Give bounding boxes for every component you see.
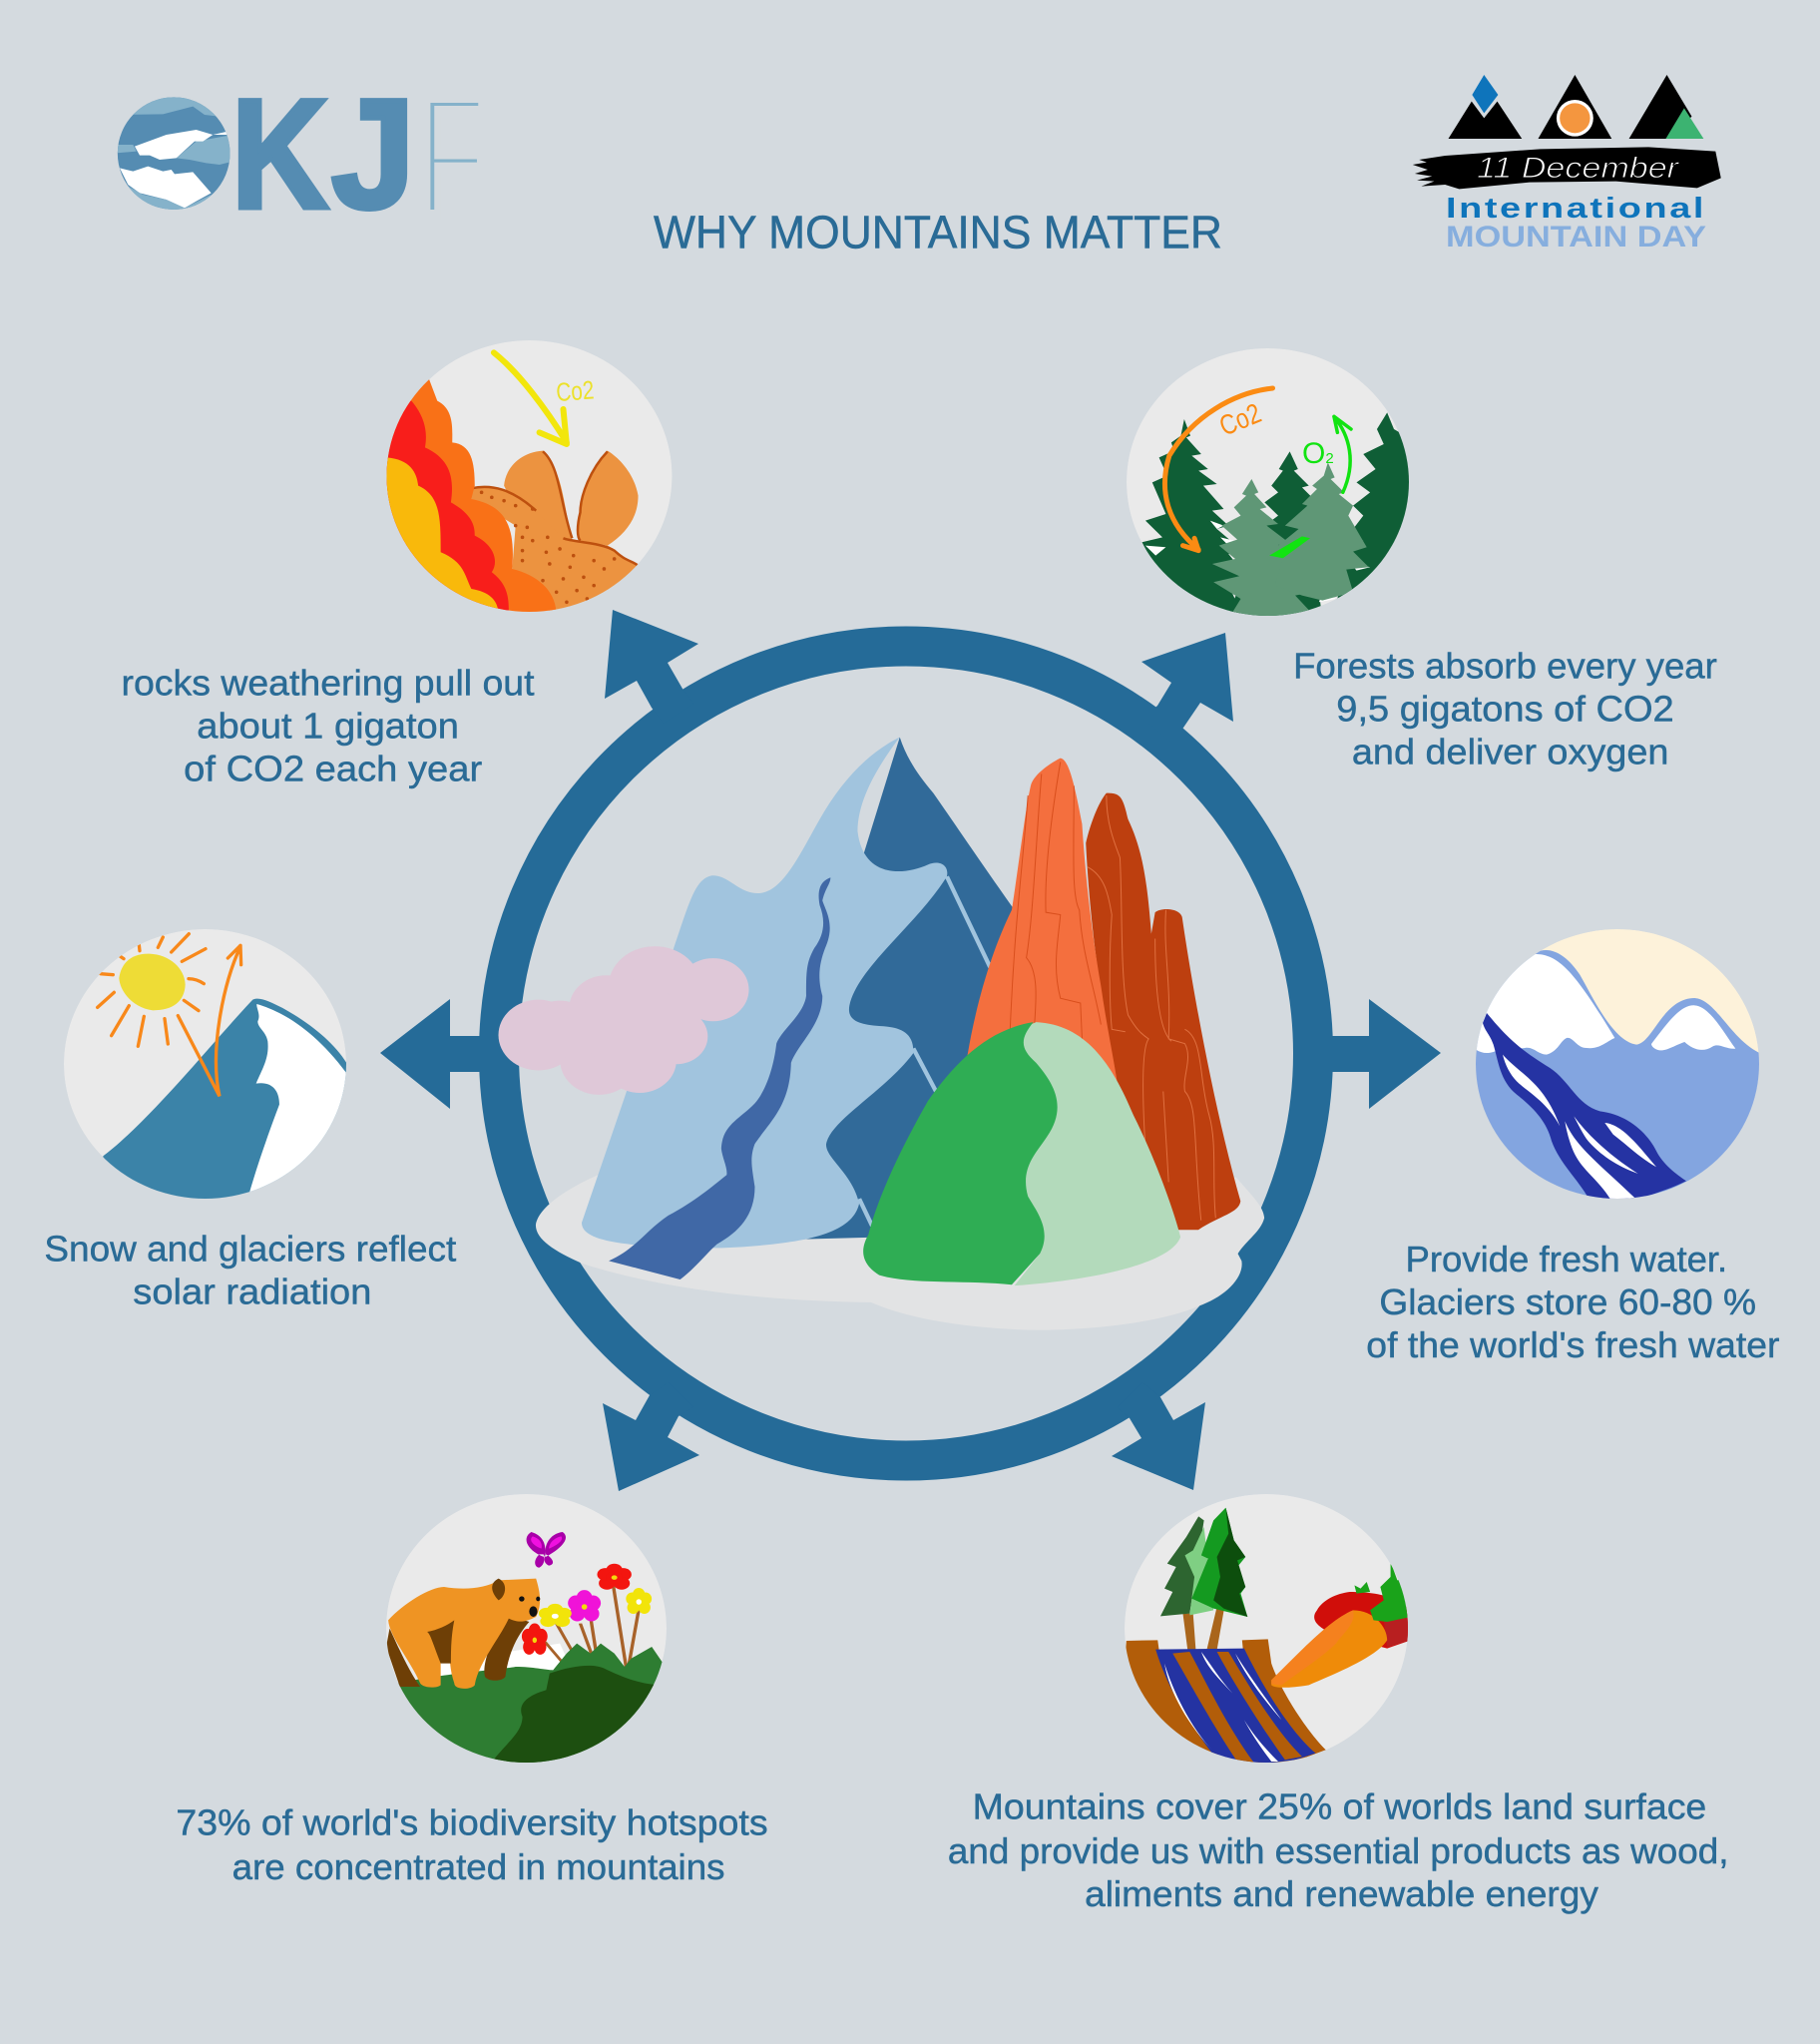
ground speckles — [482, 492, 615, 602]
icon: trees, river and vegetables — [1119, 1494, 1411, 1767]
orange rock cracks — [1010, 762, 1101, 1039]
bear ear — [492, 1579, 505, 1600]
caption: solar radiation — [133, 1272, 371, 1312]
brush stroke — [1413, 147, 1721, 189]
carrot shade — [1271, 1610, 1354, 1685]
river — [1155, 1649, 1316, 1767]
caption: are concentrated in mountains — [232, 1846, 724, 1887]
white meadow patch — [437, 1644, 574, 1677]
bear body — [388, 1579, 540, 1689]
caption: Forests absorb every year — [1293, 645, 1717, 686]
arrow: bottom left — [603, 1382, 699, 1491]
dark blue mountain — [798, 738, 1015, 1240]
dark tree centre — [1227, 451, 1322, 619]
caption — [44, 1228, 456, 1312]
yellow arrow — [494, 352, 567, 444]
logo letter J: J — [331, 68, 415, 242]
caption: about 1 gigaton — [197, 705, 459, 747]
blue mountain — [103, 999, 349, 1205]
dark red rock cracks — [1088, 795, 1215, 1221]
flower red low — [522, 1623, 548, 1655]
CO2 label: Co2 — [1215, 397, 1265, 442]
blue ridge and lake — [1474, 950, 1759, 1205]
orange CO2 arrow — [1164, 388, 1273, 551]
caption — [1366, 1239, 1780, 1365]
white snow — [249, 1004, 346, 1192]
O2 label: O2 — [1302, 437, 1334, 470]
white snow flecks — [1145, 521, 1370, 602]
flower magenta — [568, 1590, 601, 1622]
ring — [499, 647, 1313, 1461]
caption — [176, 1801, 768, 1887]
green O2 arrow — [1334, 416, 1351, 492]
icon: bear, flowers and butterfly — [379, 1494, 669, 1767]
green hill half — [863, 1022, 1058, 1284]
white peak large — [1474, 951, 1614, 1055]
arrow: left — [380, 999, 494, 1109]
logo mountains — [1413, 72, 1721, 189]
river brown stripes — [1172, 1652, 1302, 1764]
caption — [1293, 645, 1717, 772]
icon: rocks and CO2 — [369, 340, 673, 616]
panel: land and resources — [948, 1494, 1728, 1914]
flower stems — [545, 1584, 640, 1670]
orange lava layer — [386, 379, 557, 616]
flower yellow right — [626, 1588, 652, 1614]
dark tree right — [1337, 413, 1409, 599]
caption: 73% of world's biodiversity hotspots — [176, 1801, 768, 1842]
left tree light side — [1185, 1527, 1213, 1615]
ground dark — [488, 1666, 662, 1767]
rock right — [578, 451, 639, 546]
caption: and deliver oxygen — [1352, 732, 1668, 772]
caption: Mountains cover 25% of worlds land surface — [973, 1787, 1706, 1827]
arrow: top left — [605, 610, 698, 724]
logo: International Mountain Day — [1413, 72, 1721, 254]
sun rays and reflected arrow — [98, 934, 241, 1096]
caption — [948, 1787, 1728, 1914]
cloud — [499, 946, 749, 1095]
caption: 9,5 gigatons of CO2 — [1336, 689, 1674, 729]
sun — [119, 954, 186, 1010]
tree trunks — [1182, 1607, 1224, 1650]
left tree — [1160, 1516, 1204, 1616]
ring with arrows — [380, 610, 1441, 1491]
glacier light blue — [582, 738, 947, 1248]
flower red tall — [597, 1564, 632, 1590]
arrow: right — [1322, 999, 1441, 1109]
panel: forests — [1119, 348, 1717, 772]
ground light — [379, 1644, 669, 1767]
dark tree left — [1141, 419, 1241, 614]
logo emblem: mountain circle — [118, 97, 229, 210]
river islets — [1503, 1055, 1656, 1201]
yellow lava layer — [387, 457, 498, 609]
dark red rock spires — [1086, 793, 1240, 1230]
glacier crevasse lines — [859, 876, 990, 1226]
snowy base — [536, 1175, 1264, 1330]
tomato shade — [1384, 1604, 1411, 1648]
panel: fresh water — [1366, 929, 1780, 1365]
panel: snow and glaciers — [44, 929, 456, 1312]
logo letter K: K — [231, 68, 328, 242]
icon: sun and glacier — [64, 929, 349, 1205]
light tree right — [1275, 462, 1369, 601]
caption: of CO2 each year — [184, 749, 482, 789]
icon: forest with CO2 and O2 — [1119, 348, 1411, 619]
red lava layer — [387, 401, 509, 611]
green slash — [1269, 536, 1310, 558]
right tree dark side — [1213, 1508, 1247, 1617]
bear far legs — [386, 1629, 420, 1687]
International: International — [1446, 193, 1706, 225]
carrot leaves — [1354, 1562, 1411, 1622]
orange rock spire — [968, 759, 1119, 1089]
central illustration: mountains — [499, 738, 1264, 1330]
title: WHY MOUNTAINS MATTER — [654, 206, 1222, 257]
caption — [122, 662, 535, 789]
dark river — [1483, 1013, 1686, 1201]
panel: biodiversity — [176, 1494, 768, 1887]
river white streaks — [1164, 1652, 1281, 1762]
bear belly shade — [427, 1620, 454, 1664]
carrot — [1271, 1610, 1387, 1688]
CO2 label: Co2 — [555, 374, 595, 407]
caption: aliments and renewable energy — [1085, 1873, 1598, 1914]
right tree mid green — [1191, 1508, 1247, 1617]
right bank — [1242, 1639, 1326, 1767]
caption: rocks weathering pull out — [122, 662, 535, 703]
caption: of the world's fresh water — [1366, 1324, 1780, 1365]
panel: rock weathering — [122, 340, 673, 789]
rock left — [504, 451, 572, 542]
white peak small — [1651, 1005, 1735, 1050]
caption: Glaciers store 60-80 % — [1379, 1281, 1756, 1322]
tomato — [1314, 1592, 1411, 1649]
rock edges — [543, 451, 608, 541]
Mountain Day: MOUNTAIN DAY — [1446, 221, 1706, 254]
arrow: top right — [1141, 633, 1233, 744]
caption: Snow and glaciers reflect — [44, 1228, 456, 1270]
light green hill half — [966, 1022, 1180, 1285]
logo letter F: F — [418, 62, 486, 252]
date: 11 December — [1477, 152, 1679, 185]
river — [609, 877, 830, 1279]
arrow: bottom right — [1112, 1382, 1205, 1490]
light tree left — [1212, 479, 1309, 616]
butterfly — [527, 1532, 566, 1568]
caption: and provide us with essential products as wood, — [948, 1830, 1728, 1871]
ground edge — [471, 487, 639, 566]
icon: river from glacier — [1474, 929, 1759, 1205]
left bank — [1119, 1640, 1227, 1767]
rocky ground — [471, 487, 639, 616]
logo: OKJF — [118, 97, 479, 212]
caption: Provide fresh water. — [1405, 1239, 1727, 1279]
flower yellow — [539, 1604, 572, 1627]
bear eyes and mouth — [519, 1596, 540, 1617]
